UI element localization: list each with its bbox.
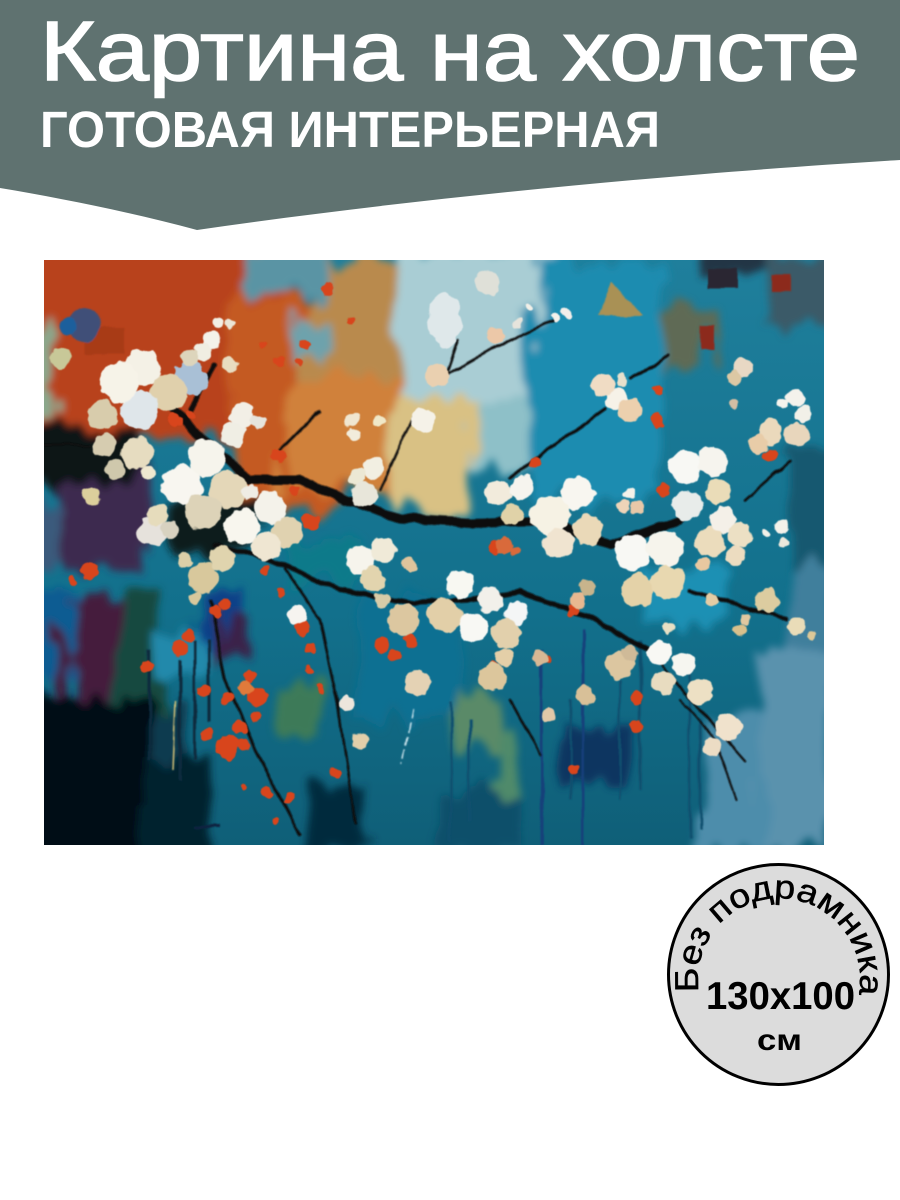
header banner: [0, 0, 900, 230]
blossom cluster: centre: [288, 271, 572, 748]
badge circle: [668, 864, 888, 1084]
blossom cluster: right: [614, 359, 811, 607]
painting background colour fields: [44, 260, 824, 845]
title: Картина на холсте: [40, 4, 860, 98]
subtitle: ГОТОВАЯ ИНТЕРЬЕРНАЯ: [40, 101, 660, 158]
painting: blossom branch on canvas: [44, 260, 824, 845]
curved label: Без подрамника: [675, 880, 878, 996]
orange and red dabs: [67, 283, 778, 824]
blossom cluster: lower right: [606, 588, 817, 756]
size value: 130х100: [706, 975, 855, 1018]
blossoms: [50, 271, 817, 756]
unit: см: [757, 1024, 802, 1057]
blossom cluster: centre left: [138, 404, 303, 603]
painting drips and dabs: [59, 268, 792, 845]
blossom cluster: left: [50, 317, 238, 506]
blossom cluster: centre right: [485, 373, 644, 558]
branches: [44, 320, 790, 835]
size badge: [667, 863, 890, 1086]
blossom cluster: lower centre: [428, 571, 596, 723]
